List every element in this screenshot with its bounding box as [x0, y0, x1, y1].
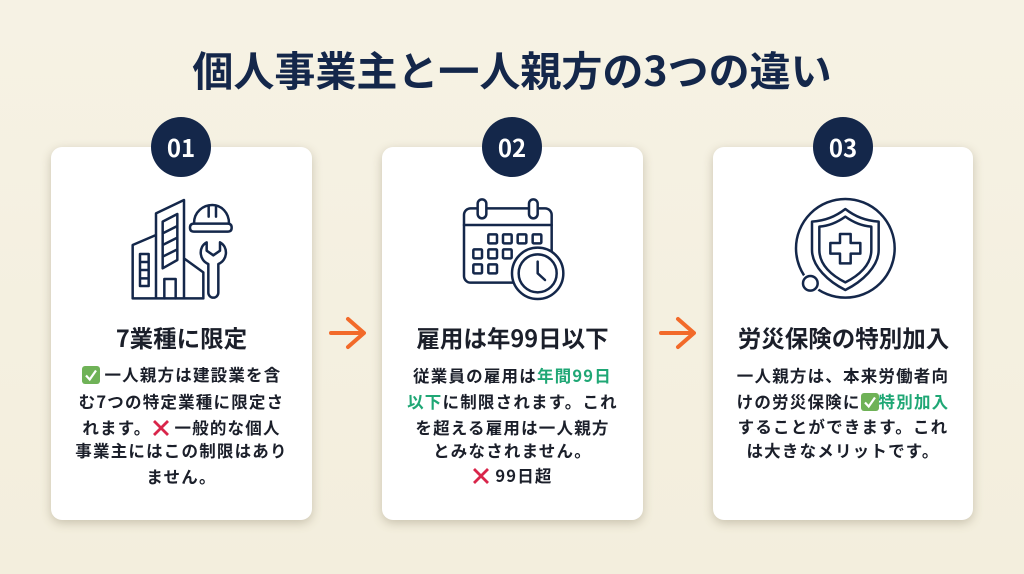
panel: card 3 — [713, 147, 973, 520]
arrow 2 — [659, 316, 696, 350]
arrow 1 — [329, 316, 366, 350]
text block: 従業員の雇用は年間99日 — [413, 363, 612, 387]
heading: 労災保険の特別加入 — [738, 320, 949, 354]
text block: とみなされません。 — [433, 438, 592, 462]
text block: 一人親方は、本来労働者向 — [737, 363, 949, 387]
text block: を超える雇用は一人親方 — [415, 415, 610, 439]
icon: buildings, helmet and wrench — [131, 198, 233, 300]
icon: calendar and clock — [462, 198, 565, 300]
title: 個人事業主と一人親方の3つの違い — [192, 38, 832, 98]
text block: 99日超 — [495, 463, 553, 487]
panel: card 2 — [382, 147, 643, 520]
badge 03 — [813, 117, 873, 177]
text block: む7つの特定業種に限定さ — [79, 389, 284, 413]
badge 03: 03 — [829, 129, 857, 164]
badge 01 — [151, 117, 211, 177]
heading: 7業種に限定 — [116, 320, 247, 354]
text block — [75, 362, 288, 488]
text block: れます。 一般的な個人 — [82, 415, 281, 439]
icon: shield with cross — [794, 198, 896, 299]
text block: 事業主にはこの制限はあり — [75, 438, 288, 462]
text block: けの労災保険に 特別加入 — [737, 389, 949, 413]
panel: card 1 — [51, 147, 312, 520]
text block — [407, 363, 618, 487]
text block: は大きなメリットです。 — [746, 438, 940, 462]
text block: 一人親方は建設業を含 — [104, 362, 281, 386]
badge 01: 01 — [167, 129, 195, 164]
badge 02: 02 — [498, 129, 526, 164]
text block: ません。 — [146, 464, 217, 488]
text block: 以下に制限されます。これ — [407, 389, 618, 413]
badge 02 — [482, 117, 542, 177]
heading: 雇用は年99日以下 — [416, 320, 609, 354]
text block: することができます。これ — [738, 414, 948, 438]
text block — [737, 363, 949, 462]
